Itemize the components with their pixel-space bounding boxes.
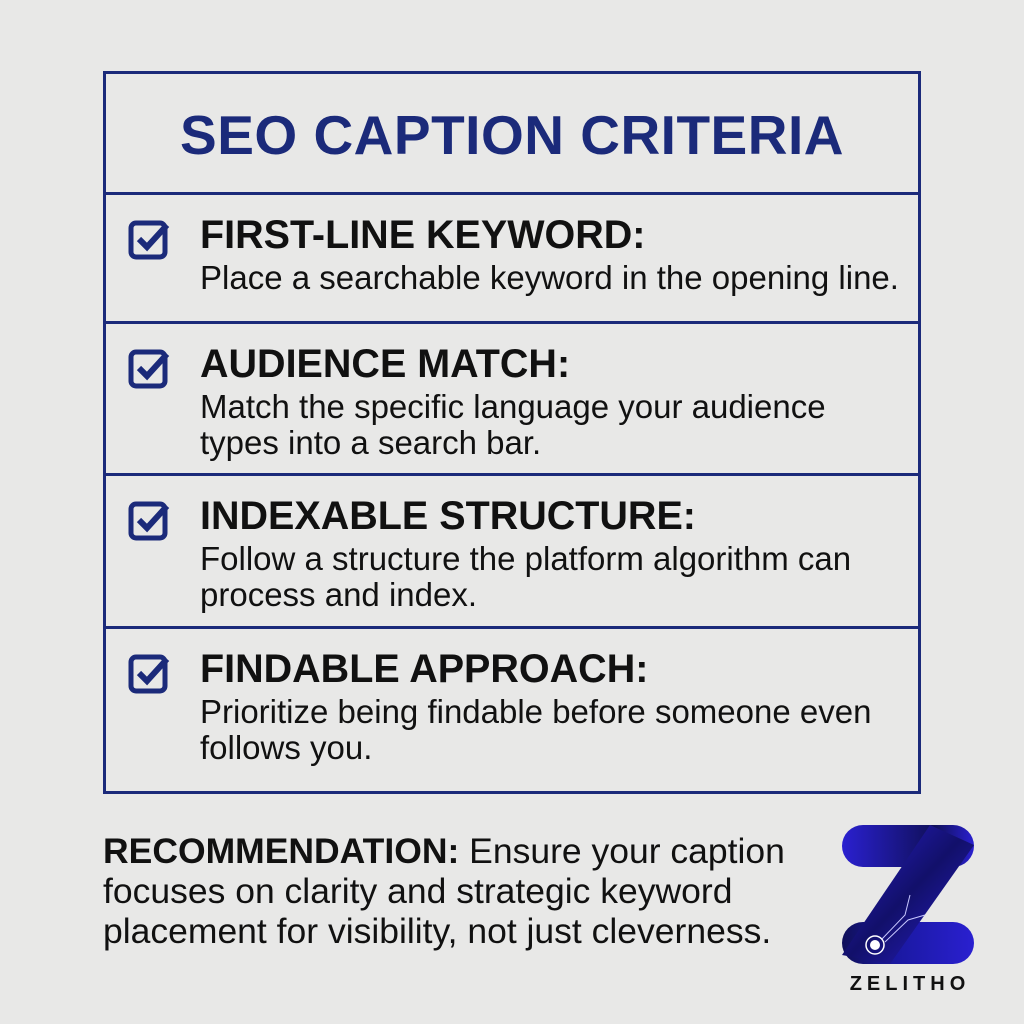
row: indexable structure — [106, 476, 918, 629]
icon: checkbox — [128, 654, 170, 694]
title: SEO CAPTION CRITERIA — [180, 104, 844, 166]
text: Prioritize being findable before someone even follows you. — [200, 693, 871, 766]
text: Place a searchable keyword in the opening line. — [200, 259, 899, 296]
heading: FIRST-LINE KEYWORD: — [200, 213, 645, 257]
logo: Zelitho — [842, 825, 974, 995]
row: first-line keyword — [106, 195, 918, 324]
text: Match the specific language your audience types into a search bar. — [200, 388, 826, 461]
icon: checkbox — [128, 220, 170, 260]
panel: criteria box — [103, 71, 921, 794]
icon: checkbox — [128, 502, 170, 540]
heading: INDEXABLE STRUCTURE: — [200, 494, 696, 538]
logo: Zelitho: ZELITHO — [850, 973, 970, 995]
text: Follow a structure the platform algorithm can process and index. — [200, 540, 851, 613]
row: audience match — [106, 324, 918, 476]
recommendation text: RECOMMENDATION: Ensure your caption focuses on clarity and strategic keyword placement for visibility, not just cleverness. — [103, 831, 785, 951]
heading: FINDABLE APPROACH: — [200, 647, 648, 691]
icon: checkbox — [128, 350, 170, 388]
title — [106, 74, 918, 195]
heading: AUDIENCE MATCH: — [200, 342, 570, 386]
row: findable approach — [128, 647, 871, 766]
